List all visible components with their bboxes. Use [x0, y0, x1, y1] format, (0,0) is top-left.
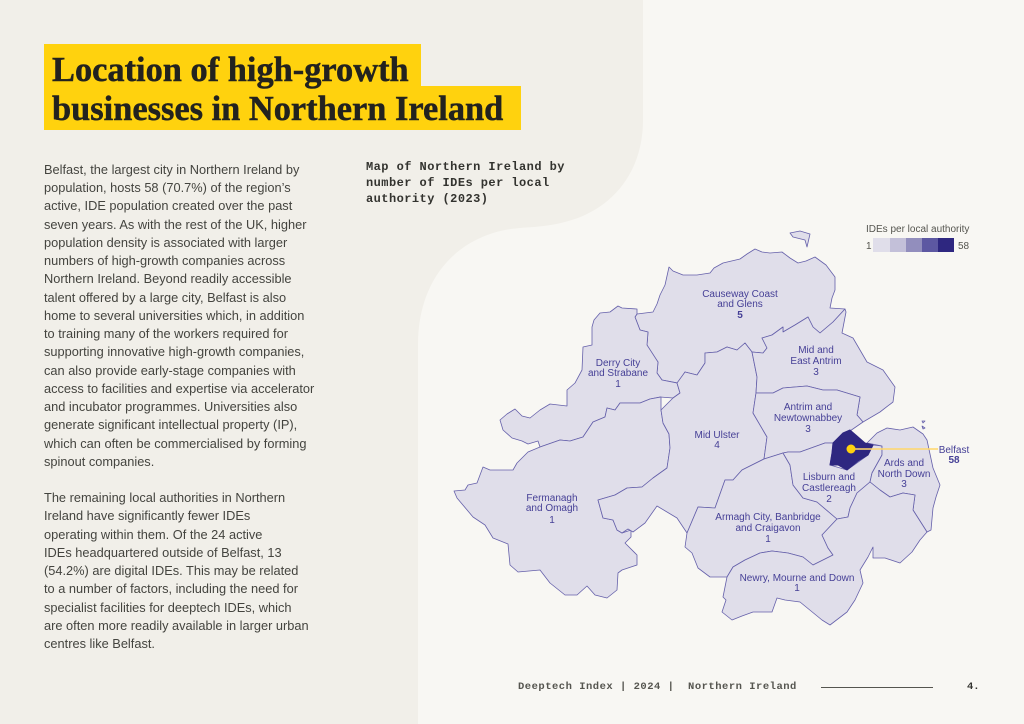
region labels: Ards and [884, 458, 924, 469]
region: Ards and North Down [867, 427, 940, 532]
region labels: East Antrim [790, 356, 842, 367]
body text: to training many of the workers required for [44, 326, 288, 341]
region: Derry City and Strabane [500, 306, 680, 447]
region labels: 1 [615, 379, 621, 390]
body text: active, IDE population created over the past [44, 198, 292, 213]
region labels: and Strabane [588, 368, 648, 379]
body text: population, hosts 58 (70.7%) of the region’s [44, 180, 291, 195]
region labels: Mid Ulster [694, 430, 740, 441]
region labels: 1 [549, 515, 555, 526]
region: Newry, Mourne and Down [722, 482, 927, 625]
title [44, 44, 521, 130]
body text: to a number of factors, including the need for [44, 581, 298, 596]
region labels: Newtownabbey [774, 413, 842, 424]
body text: population density is associated with larger [44, 235, 287, 250]
body text: which can often be commercialised by forming [44, 436, 306, 451]
map title: Map of Northern Ireland by [366, 160, 565, 174]
body text: seven years. As with the rest of the UK, higher [44, 217, 306, 232]
body text: can also provide early-stage companies with [44, 363, 296, 378]
island: Rathlin [790, 231, 810, 247]
region labels: 5 [737, 310, 743, 321]
region labels: Newry, Mourne and Down [740, 573, 854, 584]
page number: 4. [967, 681, 980, 693]
body text: Belfast, the largest city in Northern Ireland by [44, 162, 299, 177]
body text: access to facilities and expertise via accelerator [44, 381, 314, 396]
body text: and incubator programmes. Universities also [44, 399, 297, 414]
map title [366, 160, 565, 206]
region labels [526, 289, 970, 594]
body text: Ireland have significantly fewer IDEs [44, 508, 250, 523]
region labels: Castlereagh [802, 483, 856, 494]
body text: Northern Ireland. Beyond readily accessible [44, 271, 292, 286]
body text: IDEs headquartered outside of Belfast, 13 [44, 545, 282, 560]
small islands [922, 421, 925, 429]
body text: spinout companies. [44, 454, 154, 469]
body text: specialist facilities for deeptech IDEs, which [44, 600, 292, 615]
region labels: Antrim and [784, 402, 832, 413]
body text: numbers of high-growth companies across [44, 253, 285, 268]
region labels: 3 [813, 367, 819, 378]
legend: 58 [958, 241, 970, 252]
region labels: and Craigavon [735, 523, 801, 534]
legend: IDEs per local authority [866, 224, 969, 235]
region labels: Mid and [798, 345, 834, 356]
body text: talent offered by a large city, Belfast is also [44, 290, 286, 305]
region labels: Causeway Coast [702, 289, 778, 300]
footer text: Deeptech Index | 2024 | Northern Ireland [518, 681, 797, 693]
region labels: Lisburn and [803, 472, 855, 483]
region labels: 58 [948, 455, 960, 466]
region: Antrim and Newtownabbey [753, 386, 863, 459]
region: Fermanagh and Omagh [454, 397, 670, 598]
region labels: 3 [901, 479, 907, 490]
body text: (54.2%) are digital IDEs. This may be related [44, 563, 298, 578]
body text: home to several universities which, in addition [44, 308, 304, 323]
region labels: 1 [794, 583, 800, 594]
region labels: and Glens [717, 299, 763, 310]
map title: number of IDEs per local [366, 176, 550, 190]
body text [44, 162, 314, 651]
region: Lisburn and Castlereagh [783, 443, 882, 519]
legend [866, 224, 970, 252]
body text: generate significant intellectual property (IP), [44, 417, 297, 432]
region labels: Derry City [596, 358, 640, 369]
body text: are often more readily available in larger urban [44, 618, 309, 633]
leader line: Belfast [846, 444, 938, 454]
region labels: Armagh City, Banbridge [715, 512, 821, 523]
region: Mid Ulster [598, 343, 767, 533]
title: businesses in Northern Ireland [52, 90, 503, 128]
map title: authority (2023) [366, 192, 488, 206]
region labels: 4 [714, 440, 720, 451]
body text: operating within them. Of the 24 active [44, 527, 262, 542]
region labels: 2 [826, 494, 832, 505]
region: Belfast [830, 430, 873, 470]
region: Armagh City, Banbridge and Craigavon [685, 453, 837, 577]
region labels: Belfast [939, 445, 970, 456]
region: Mid and East Antrim [752, 309, 895, 422]
region labels: North Down [878, 469, 930, 480]
region labels: 3 [805, 424, 811, 435]
region: Causeway Coast and Glens [635, 249, 845, 383]
legend: 1 [866, 241, 872, 252]
body text: supporting innovative high-growth companies, [44, 344, 304, 359]
region labels: 1 [765, 534, 771, 545]
body text: centres like Belfast. [44, 636, 155, 651]
title: Location of high-growth [52, 51, 409, 89]
region labels: and Omagh [526, 503, 578, 514]
region labels: Fermanagh [526, 493, 578, 504]
footer rule [821, 687, 933, 688]
body text: The remaining local authorities in Northern [44, 490, 285, 505]
